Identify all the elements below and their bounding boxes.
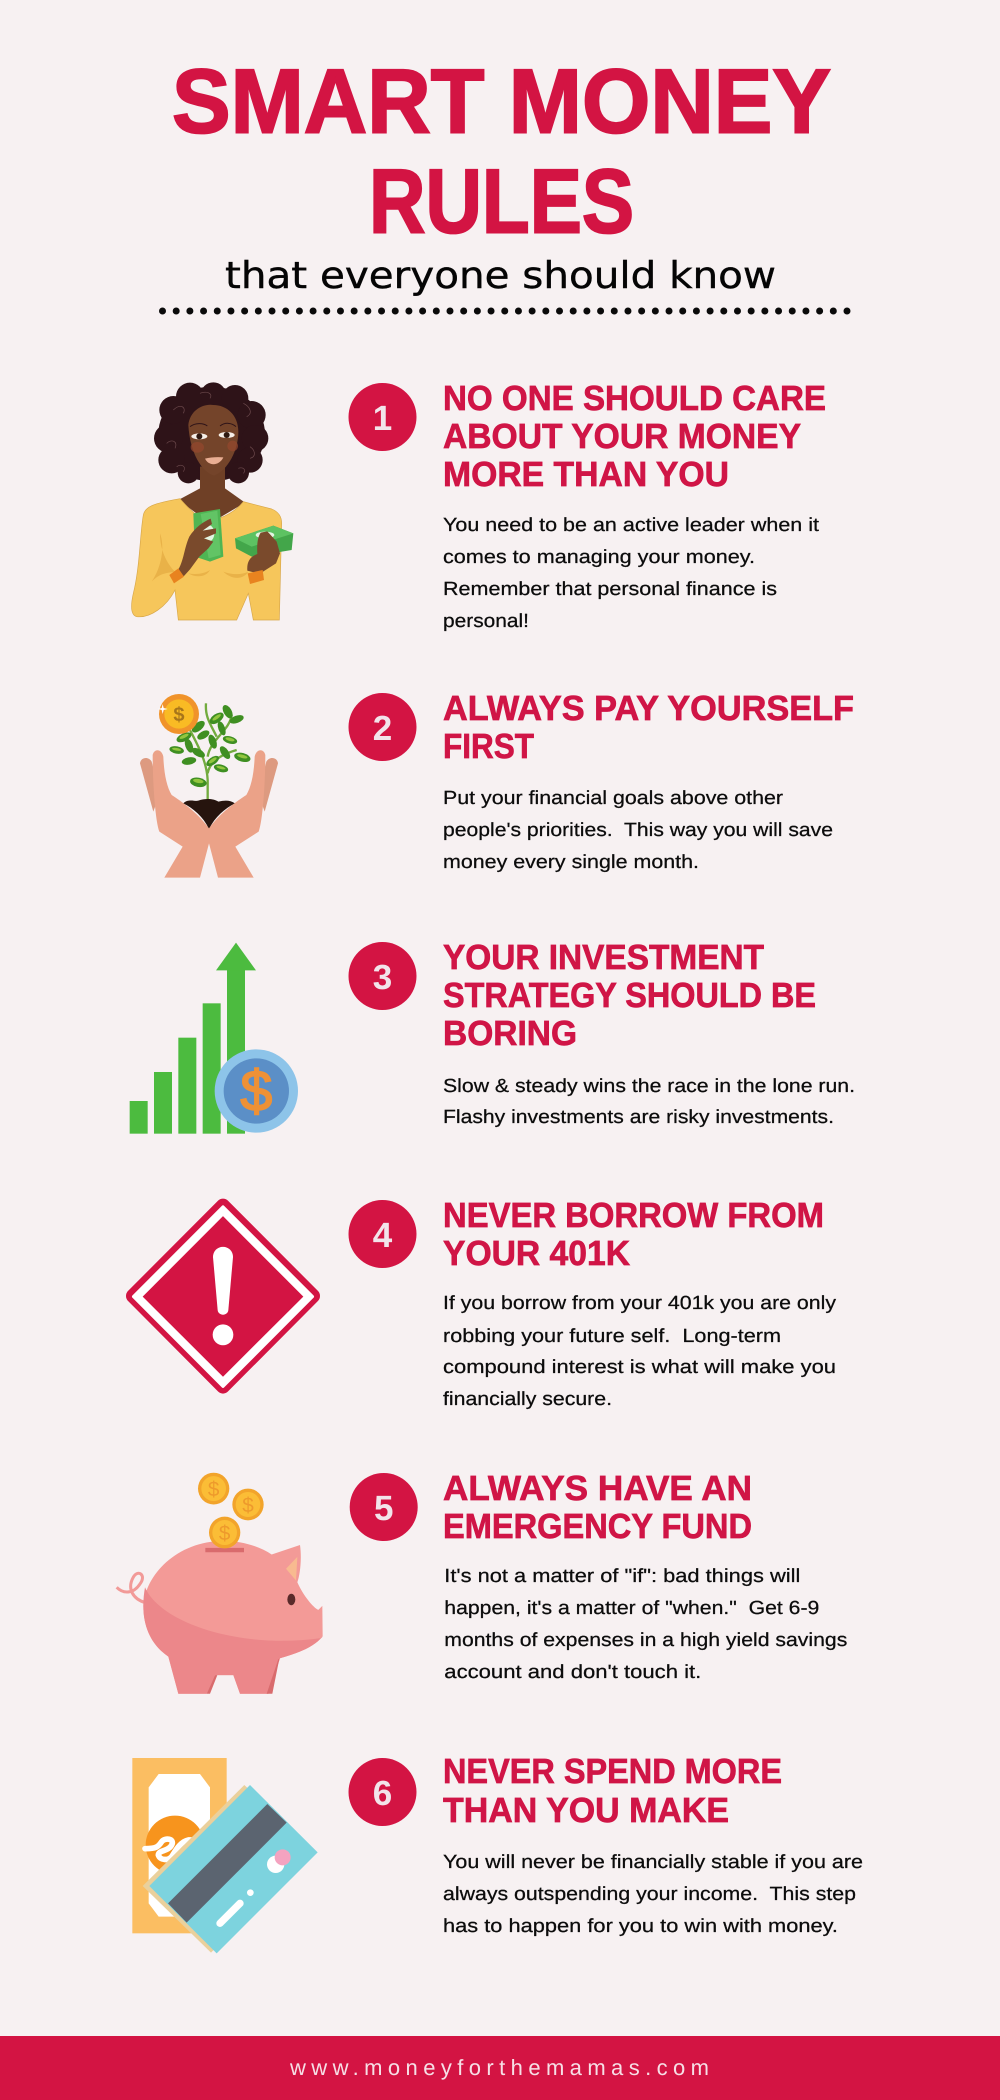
heading 3: BORING [443,1014,577,1053]
bills [193,509,223,562]
footer bar [0,2036,1000,2100]
number badge 5: 5 [374,1489,393,1528]
body text 1 [443,515,820,632]
body text 6: always outspending your income. This step [443,1884,856,1905]
rule 2 [140,689,854,878]
heading 3 [443,938,816,1053]
body text 5: It's not a matter of "if": bad things will [444,1566,800,1587]
heading 4: YOUR 401K [443,1234,630,1273]
number badge 3: 3 [373,958,392,997]
number badge 5 [350,1473,418,1541]
body text 6: You will never be financially stable if you are [443,1852,863,1873]
heading 6 [443,1752,782,1830]
heading 1 [443,379,826,494]
icon: warning diamond [133,1206,313,1387]
body text 4 [443,1293,837,1410]
title: RULES [369,152,634,252]
hands [140,750,209,878]
icon: piggy bank with coins: $ [242,1493,254,1517]
icon: piggy bank with coins: $ [219,1521,230,1545]
pig body [143,1541,323,1694]
body text 1: personal! [443,611,529,632]
heading 5 [443,1469,752,1546]
heading 3: STRATEGY SHOULD BE [443,976,816,1015]
footer website: www.moneyforthemamas.com [289,2055,709,2080]
body text 2: Put your financial goals above other [443,788,784,809]
heading 1: NO ONE SHOULD CARE [443,379,826,418]
icon: woman holding money [132,382,293,620]
neck and chest [178,467,245,523]
body text 1: Remember that personal finance is [443,579,777,600]
number badge 6 [348,1758,416,1826]
heading 5: EMERGENCY FUND [443,1507,752,1546]
coins [198,1473,264,1548]
number badge 2: 2 [373,709,392,748]
coin: $ [173,703,185,725]
body text 5: account and don't touch it. [444,1662,701,1683]
heading 2: FIRST [443,727,534,766]
icon: hands holding plant and coin [140,694,278,878]
body text 3: Flashy investments are risky investments. [443,1107,834,1128]
icon: banknote and credit card [132,1758,318,1953]
heading 2 [443,689,854,766]
number badge 1 [348,383,416,451]
body text 2: people's priorities. This way you will save [443,820,833,841]
body text 6: has to happen for you to win with money. [443,1916,838,1937]
number badge 1: 1 [373,399,392,438]
tail [117,1573,145,1602]
body text 2 [443,788,833,873]
body text 4: compound interest is what will make you [443,1357,836,1378]
body text 3: Slow & steady wins the race in the lone run. [443,1076,855,1097]
subtitle: that everyone should know [225,254,776,297]
rule 1 [132,379,826,632]
sweater [132,499,282,620]
title: SMART MONEY [172,52,831,152]
body text 5: happen, it's a matter of "when." Get 6-9 [444,1598,819,1619]
heading 5: ALWAYS HAVE AN [443,1469,752,1508]
heading 4 [443,1196,824,1273]
body text 4: robbing your future self. Long-term [443,1326,781,1347]
number badge 6: 6 [373,1774,392,1813]
body text 4: financially secure. [443,1389,612,1410]
number badge 4 [348,1200,416,1268]
body text 4: If you borrow from your 401k you are only [443,1293,837,1314]
rule 6 [132,1752,863,1953]
heading 6: THAN YOU MAKE [443,1791,729,1830]
heading 1: MORE THAN YOU [443,455,729,494]
heading 1: ABOUT YOUR MONEY [443,417,801,456]
number badge 2 [348,693,416,761]
number badge 3 [348,942,416,1010]
icon: growth chart with dollar coin [130,943,298,1134]
title [172,52,831,252]
body text 1: You need to be an active leader when it [443,515,820,536]
rule 4 [133,1196,837,1410]
body text 2: money every single month. [443,852,699,873]
body text 1: comes to managing your money. [443,547,755,568]
icon: piggy bank with coins: $ [208,1477,219,1501]
icon: growth chart with dollar coin: $ [240,1059,272,1123]
body text 5: months of expenses in a high yield savings [444,1630,847,1651]
heading 3: YOUR INVESTMENT [443,938,764,977]
icon: piggy bank with coins [117,1473,323,1694]
rule 3 [130,938,855,1134]
heading 6: NEVER SPEND MORE [443,1752,782,1791]
body text 6 [443,1852,863,1937]
coin [158,694,199,734]
body text 3 [443,1076,855,1128]
number badge 4: 4 [373,1216,393,1255]
hands [176,519,216,576]
heading 2: ALWAYS PAY YOURSELF [443,689,854,728]
heading 4: NEVER BORROW FROM [443,1196,824,1235]
rule 5 [117,1469,847,1694]
soil [183,799,235,829]
body text 5 [444,1566,847,1683]
